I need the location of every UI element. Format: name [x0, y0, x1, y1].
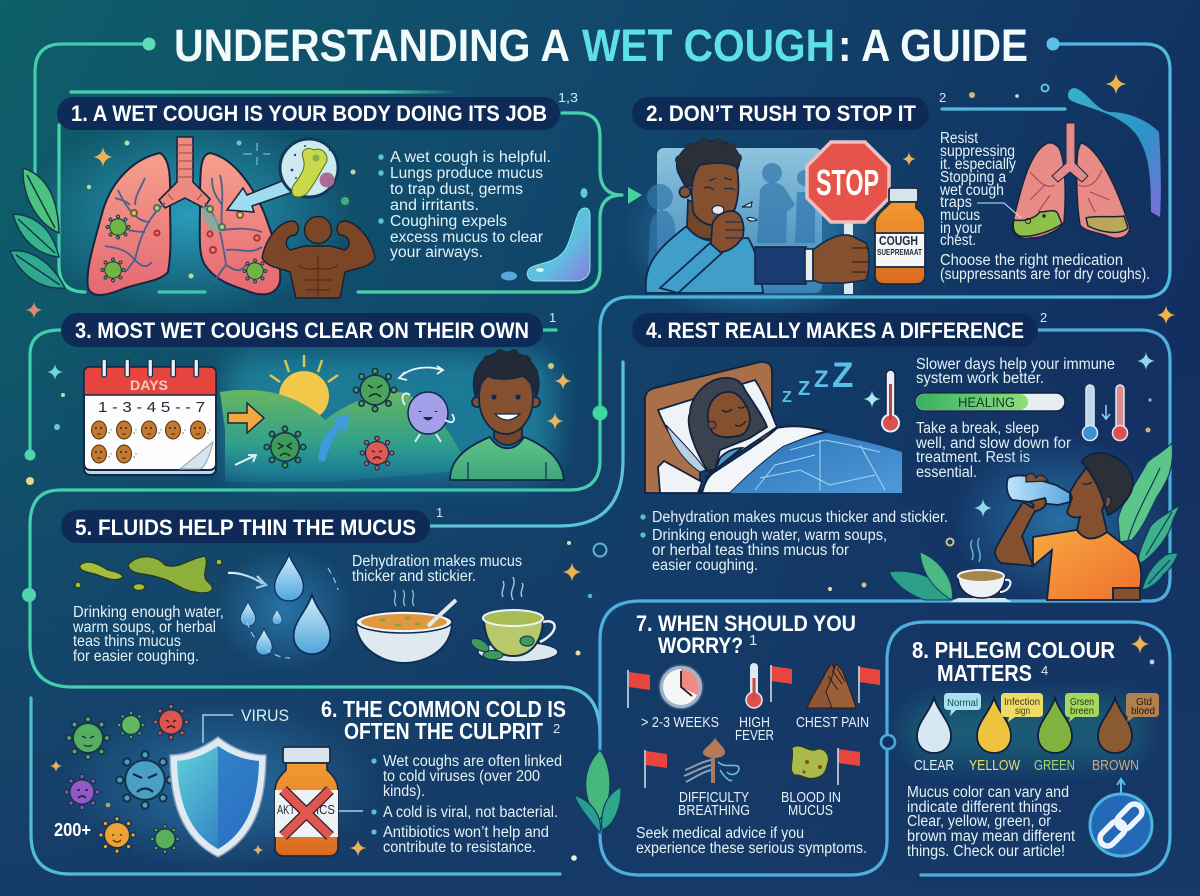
panel 7: when to worry	[628, 611, 880, 857]
decorative sparkles panel 2	[902, 74, 1126, 166]
text: bullets panel 6: kinds).	[383, 783, 425, 800]
text: panel 4 rest: Take a break, sleep	[916, 420, 1039, 437]
text: bullets panel 1: A wet cough is helpful.	[390, 149, 551, 166]
text: panel 2 description: mucus	[940, 207, 980, 224]
label difficulty breathing: DIFFICULTY	[679, 790, 749, 806]
bubble brown	[1126, 693, 1159, 722]
chart: healing progress bar	[915, 393, 1065, 411]
label 200+: 200+	[54, 820, 91, 840]
bubble yellow: sign	[1015, 706, 1030, 717]
decorative glow behind panel 3	[225, 352, 555, 480]
label high fever: HIGH	[739, 715, 770, 731]
heading pill 3: 3. MOST WET COUGHS CLEAR ON THEIR OWN	[75, 318, 529, 343]
text: panel 4 bullets: easier coughing.	[652, 557, 758, 574]
text: mucus colour: things. Check our article!	[907, 843, 1065, 860]
heading pill 1: 1. A WET COUGH IS YOUR BODY DOING ITS JOB	[71, 101, 547, 126]
icon: green tea	[469, 577, 558, 662]
illustration: lungs with trapped mucus	[977, 123, 1130, 238]
label virus with leader	[203, 706, 289, 743]
illustration: cough bottle: COUGH	[879, 233, 918, 248]
text: panel 4 intro: system work better.	[916, 370, 1044, 387]
decorative glow behind lungs	[25, 115, 355, 315]
label blood in mucus: MUCUS	[788, 803, 833, 819]
labels drops: CLEAR	[914, 758, 954, 774]
citation 4: 4	[1041, 663, 1048, 678]
title connector dot left	[142, 38, 156, 50]
icon: colour drops	[917, 698, 1132, 753]
text: bullets panel 1: and irritants.	[390, 197, 479, 214]
panel 6: common cold	[50, 696, 621, 870]
heading pill 2: 2. DON’T RUSH TO STOP IT	[646, 101, 917, 126]
decorative glow behind drops	[213, 548, 357, 672]
icon: antibiotics bottle with x	[275, 747, 338, 856]
text: panel 4 bullets: or herbal teas thins mucus for	[652, 542, 849, 559]
label high fever	[735, 715, 774, 744]
text: bullets panel 6: Wet coughs are often linked	[383, 753, 562, 770]
icon: zzz: Z	[798, 378, 810, 400]
text: bullets panel 1: to trap dust, germs	[390, 181, 523, 198]
illustration: stop sign	[807, 142, 889, 294]
decorative glow behind man	[620, 145, 900, 325]
icon: shield	[170, 737, 266, 857]
text: panel 4 rest: essential.	[916, 464, 977, 481]
text: bullets panel 6: Antibiotics won’t help and	[383, 824, 549, 841]
illustration: background scene	[647, 148, 822, 293]
illustration: plant and cup bottom	[889, 538, 1012, 602]
icon: antibiotics bottle with x: AKT	[277, 802, 295, 817]
title: WET COUGH	[582, 20, 835, 71]
icon: leaves left	[10, 168, 65, 288]
arrow to panel 2	[628, 187, 642, 204]
text: bullets panel 1: your airways.	[390, 244, 483, 261]
heading 8: MATTERS	[937, 660, 1032, 686]
decorative sparkles panel 8	[1130, 634, 1154, 664]
illustration: sleeping woman in bed	[645, 362, 902, 493]
panel 3 connector dot	[24, 450, 36, 460]
icon: thermometer	[746, 663, 762, 708]
leader line	[339, 810, 363, 812]
icon: clock	[659, 665, 703, 709]
text: mucus colour: brown may mean different	[907, 828, 1076, 845]
label weeks: > 2-3 WEEKS	[641, 715, 719, 731]
panel 8: phlegm colour	[905, 634, 1159, 860]
icon: blue slime top right	[1068, 88, 1161, 217]
title	[174, 20, 1028, 71]
icon: blood in mucus	[791, 746, 828, 778]
icon: zzz	[782, 356, 853, 406]
text: bullets panel 1: excess mucus to clear	[390, 229, 543, 246]
citation 1: 1	[749, 632, 757, 649]
panel 1: body doing its job	[10, 90, 590, 315]
citation 1: 1	[436, 505, 443, 520]
icon: zzz: Z	[782, 389, 792, 406]
bubble yellow	[1001, 693, 1043, 722]
text: panel 4 bullets: Drinking enough water, warm soups,	[652, 527, 887, 544]
text: bullets panel 6: A cold is viral, not bacterial.	[383, 804, 558, 821]
decorative sparkles panel 4	[828, 306, 1176, 591]
text: panel 2 description: it. especially	[940, 156, 1016, 173]
text: panel 4 bullets	[640, 509, 948, 574]
text: panel 2 description: chest.	[940, 232, 976, 249]
icon: antibiotics bottle with x: ICS	[316, 802, 335, 817]
text: panel 5 dehydration: thicker and stickier.	[352, 568, 476, 585]
bubble green: Grsen	[1070, 697, 1094, 708]
labels drops: BROWN	[1092, 758, 1139, 774]
citation 1,3: 1,3	[558, 90, 578, 105]
label difficulty breathing: BREATHING	[678, 803, 750, 819]
icon: thermometer	[882, 370, 899, 432]
text: mucus colour	[907, 784, 1076, 860]
icon: soup bowl	[356, 590, 456, 663]
chart: healing progress bar: HEALING	[958, 395, 1015, 410]
icon: difficulty breathing	[684, 738, 739, 783]
text: panel 2 description	[939, 130, 1150, 283]
citation 1: 1	[549, 310, 556, 325]
label difficulty breathing	[678, 790, 750, 819]
title: UNDERSTANDING A	[174, 20, 570, 71]
text: panel 2 description: Resist	[940, 130, 979, 147]
text: panel 2 description: (suppressants are for dry coughs).	[940, 266, 1150, 283]
text: mucus colour: indicate different things.	[907, 799, 1062, 816]
heading 7: 7. WHEN SHOULD YOU	[636, 611, 856, 636]
bubble normal: Normal	[947, 697, 978, 709]
label blood in mucus	[781, 790, 841, 819]
text: panel 4 intro	[916, 356, 1115, 387]
text: panel 4 intro: Slower days help your immune	[916, 356, 1115, 373]
icon: muscular figure	[262, 216, 375, 298]
icon: calendar: DAYS	[130, 378, 168, 393]
heading pill 4: 4. REST REALLY MAKES A DIFFERENCE	[646, 318, 1024, 343]
icon: mucus blobs	[75, 556, 222, 593]
arrow to lung	[227, 179, 293, 212]
icon: group of viruses	[64, 704, 189, 853]
panel 7/8 connector ring	[881, 735, 895, 749]
heading 6	[321, 696, 566, 744]
title connector dot right	[1046, 38, 1060, 50]
illustration: coughing man	[646, 138, 763, 293]
heading 6: OFTEN THE CULPRIT	[344, 718, 543, 744]
icon: hands on chest	[807, 663, 856, 708]
heading 7	[636, 611, 856, 658]
panel 5: fluids	[61, 505, 606, 672]
text: panel 5 drinking: warm soups, or herbal	[72, 619, 216, 636]
bubble normal	[944, 693, 981, 716]
text: panel 2 description: suppressing	[940, 143, 1015, 160]
panel 4: rest	[632, 306, 1180, 605]
bubble yellow: Infection	[1004, 697, 1040, 708]
bubble brown: Gtd	[1136, 697, 1152, 708]
text: panel 4 rest: treatment. Rest is	[916, 449, 1030, 466]
text: panel 5 drinking: Drinking enough water,	[73, 604, 224, 621]
labels drops	[914, 758, 1139, 774]
icon: blue and red thermometers	[1082, 385, 1128, 440]
text: bullets panel 1: Lungs produce mucus	[390, 165, 543, 182]
decorative water ring dots	[247, 568, 338, 658]
illustration: man drinking water	[995, 453, 1141, 600]
text: bullets panel 1: Coughing expels	[390, 213, 507, 230]
citation 2: 2	[939, 90, 946, 105]
text: seek advice	[636, 825, 867, 857]
text: seek advice: Seek medical advice if you	[636, 825, 804, 842]
icon: magnified mucus	[280, 139, 338, 197]
illustration: stop sign: STOP	[816, 162, 879, 203]
illustration: plant right	[1118, 443, 1180, 590]
text: panel 2 description: wet cough	[939, 182, 1004, 199]
heading 7: WORRY?	[658, 633, 743, 658]
panel 3: clear on their own	[26, 302, 572, 485]
icon: chain link	[1090, 779, 1152, 856]
label high fever: FEVER	[735, 728, 774, 744]
text: bullets panel 6	[371, 753, 562, 856]
label chest pain: CHEST PAIN	[796, 715, 869, 731]
illustration: lungs	[87, 137, 280, 295]
heading pill 3	[61, 313, 543, 347]
arrow to drops	[228, 573, 266, 588]
illustration: hand holding sign	[755, 235, 869, 284]
labels drops: YELLOW	[969, 758, 1020, 774]
illustration: leaf	[574, 750, 621, 833]
text: panel 4 bullets: Dehydration makes mucus thicker and stickier.	[652, 509, 948, 526]
citation 2: 2	[1040, 310, 1047, 325]
icon: calendar: 1 - 3 - 4 5 - - 7	[98, 400, 205, 416]
text: panel 5 dehydration	[352, 553, 522, 585]
text: panel 5 drinking: for easier coughing.	[73, 648, 199, 665]
decorative sparkles panel 3	[26, 302, 572, 485]
illustration: smiling man	[450, 349, 564, 480]
icon: zzz: Z	[832, 356, 853, 395]
arrow small white	[235, 455, 256, 465]
text: panel 5 dehydration: Dehydration makes mucus	[352, 553, 522, 570]
text: panel 2 description: traps	[940, 194, 972, 211]
icon: viruses and immune cell	[264, 368, 454, 470]
text: panel 4 rest: well, and slow down for	[915, 435, 1071, 452]
icon: water drops	[240, 554, 330, 655]
flags	[628, 665, 880, 788]
callout bubbles	[944, 693, 1159, 722]
text: panel 4 rest	[915, 420, 1071, 481]
panel 2: don't rush	[620, 74, 1161, 325]
decorative sparkles panel 5	[562, 541, 606, 656]
virus in lungs	[101, 215, 267, 283]
decorative glow behind drops	[905, 700, 1145, 762]
heading pill 4	[632, 313, 1038, 347]
heading 8: 8. PHLEGM COLOUR	[912, 637, 1115, 663]
decorative glow behind shield	[60, 700, 380, 870]
heading 8	[912, 637, 1115, 686]
arrow blue	[318, 414, 350, 462]
arrow double white	[399, 366, 443, 380]
text: bullets panel 6: contribute to resistance.	[383, 839, 536, 856]
decorative sparkles panel 6	[50, 760, 577, 861]
title: : A GUIDE	[838, 20, 1028, 71]
text: panel 2 description: in your	[940, 220, 982, 237]
text: panel 2 description: Choose the right medication	[940, 252, 1123, 269]
illustration: cough bottle	[875, 188, 925, 284]
text: panel 5 drinking	[72, 604, 224, 665]
heading pill 5: 5. FLUIDS HELP THIN THE MUCUS	[75, 515, 416, 540]
blood spots	[802, 760, 822, 774]
bubble green	[1065, 693, 1099, 722]
decorative sparkles panel 1	[87, 140, 356, 278]
illustration: cough bottle: SUEPREMAAT	[877, 248, 922, 257]
bubble green: breen	[1070, 706, 1094, 717]
illustration: sun and hills	[220, 355, 470, 482]
bubble brown: bloed	[1131, 706, 1155, 717]
text: bullets panel 1	[378, 149, 551, 261]
panel 3/4 connector dot	[592, 406, 608, 420]
text: bullets panel 6: to cold viruses (over 200	[383, 768, 540, 785]
icon: zzz: Z	[814, 366, 829, 393]
citation 2: 2	[553, 721, 560, 736]
icon: calendar	[84, 359, 216, 475]
text: panel 5 drinking: teas thins mucus	[73, 633, 181, 650]
text: mucus colour: Clear, yellow, green, or	[907, 813, 1051, 830]
icon: slime	[501, 188, 590, 281]
panel 5 connector dot	[22, 588, 36, 602]
heading 6: 6. THE COMMON COLD IS	[321, 696, 566, 722]
text: mucus colour: Mucus color can vary and	[907, 784, 1069, 801]
label virus with leader: VIRUS	[241, 706, 289, 725]
arrow orange	[228, 403, 264, 433]
text: panel 2 description: Stopping a	[940, 169, 1006, 186]
text: seek advice: experience these serious symptoms.	[636, 840, 867, 857]
label blood in mucus: BLOOD IN	[781, 790, 841, 806]
labels drops: GREEN	[1034, 758, 1075, 774]
decorative glow behind man	[950, 435, 1170, 605]
